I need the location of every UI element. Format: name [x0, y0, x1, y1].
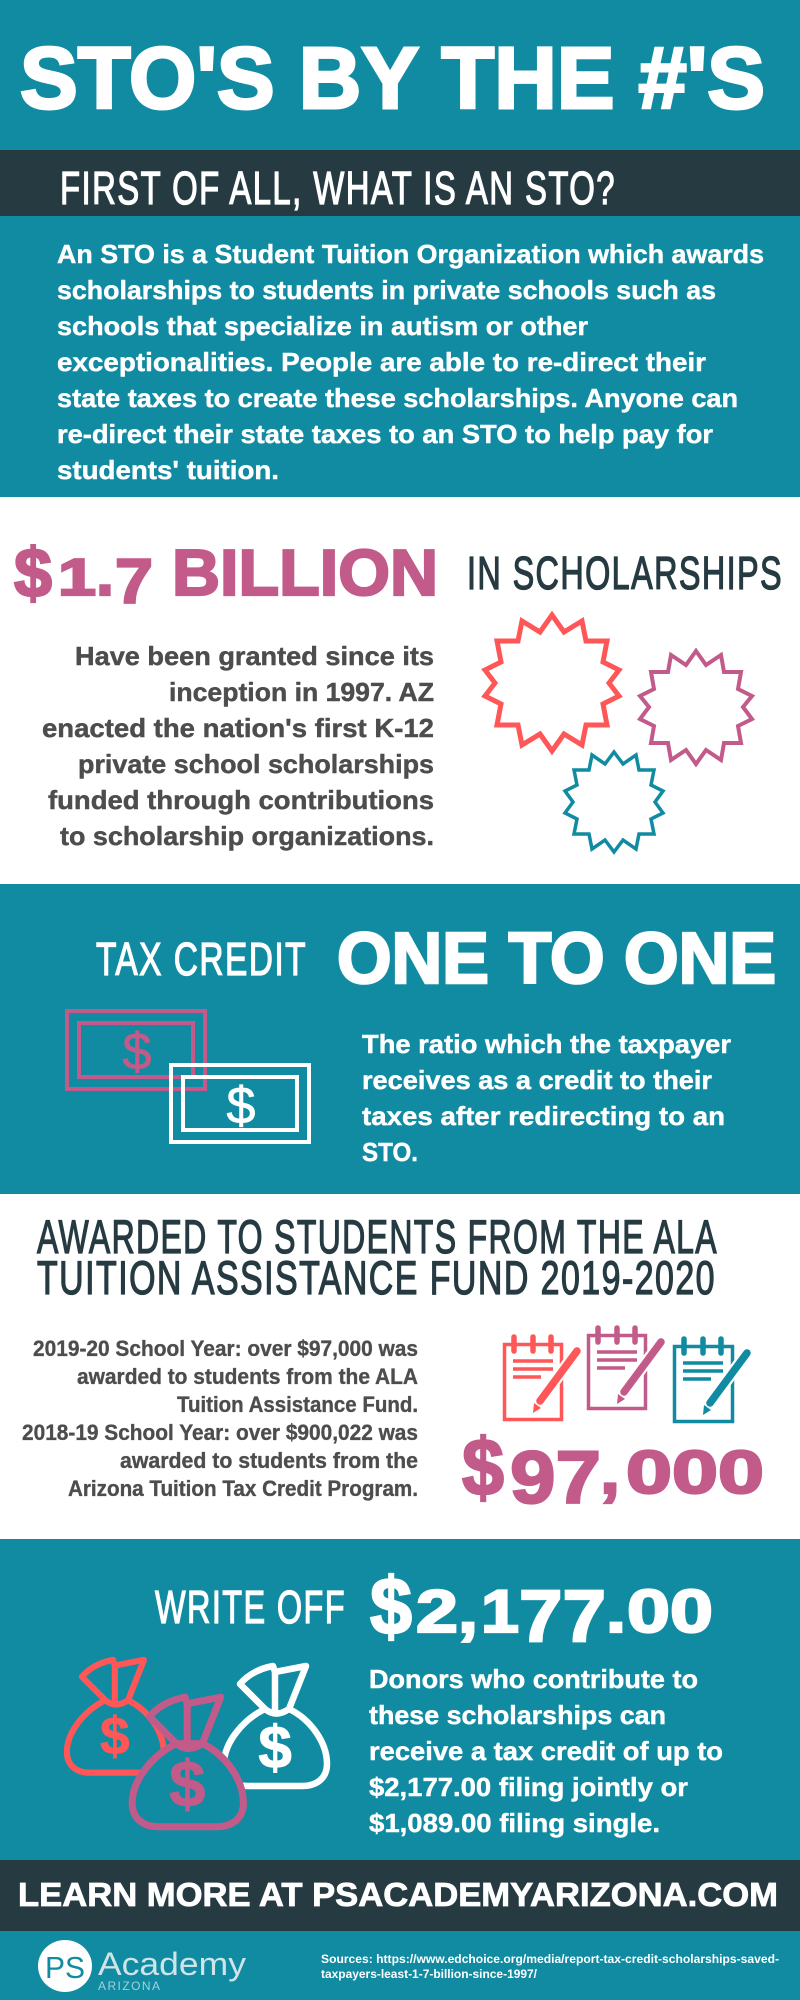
stat: $1.7 billion	[14, 534, 438, 617]
text block: award details: 2018-19 School Year: over $900,022 was	[22, 1420, 418, 1445]
stat: $2,177.00: 77	[519, 1576, 606, 1657]
icon: red money bag	[67, 1660, 164, 1773]
text block: award details: Arizona Tuition Tax Credit Program.	[68, 1476, 418, 1501]
text block: ratio	[362, 1029, 731, 1167]
text block: definition: state taxes to create these scholarships. Anyone can	[57, 383, 738, 413]
text block: definition	[57, 239, 764, 485]
panel: tax credit	[0, 884, 800, 1194]
panel: header	[0, 0, 800, 150]
text block: definition: schools that specialize in autism or other	[57, 311, 588, 341]
stat: $1.7 billion: .	[96, 536, 114, 609]
logo: PS Academy Arizona	[38, 1940, 246, 1993]
heading: write off: WRITE OFF	[155, 1581, 346, 1633]
text block: sources	[321, 1954, 779, 1981]
stat: $2,177.00	[370, 1562, 713, 1657]
icon: red money bag: $	[100, 1707, 129, 1766]
text block: definition: exceptionalities. People are able to re-direct their	[57, 347, 706, 377]
panel: footer	[0, 1931, 800, 2000]
logo: PS Academy Arizona: ARIZONA	[98, 1979, 160, 1993]
logo: PS Academy Arizona: PS	[45, 1950, 85, 1985]
stat: $97,000	[462, 1423, 764, 1519]
title: STO'S BY THE #'S	[20, 30, 765, 127]
icon: pink starburst	[640, 651, 752, 764]
text block: donors: $1,089.00 filing single.	[369, 1808, 660, 1838]
stat: $2,177.00: .	[606, 1577, 626, 1646]
stat: $2,177.00: 1	[481, 1578, 519, 1645]
stat: $2,177.00: ,	[458, 1577, 478, 1646]
icon: teal notepad	[674, 1339, 747, 1422]
stat: $2,177.00: $	[370, 1562, 412, 1652]
icon: pink banknote: $	[123, 1023, 152, 1081]
text block: history: Have been granted since its	[75, 641, 434, 671]
icon: pink money bag: $	[169, 1747, 205, 1820]
text block: sources: taxpayers-least-1-7-billion-since-1997/	[321, 1969, 538, 1981]
icon: pink notepad	[588, 1328, 661, 1408]
stat: $2,177.00: 2	[416, 1578, 458, 1645]
text block: history: funded through contributions	[48, 785, 434, 815]
stat: one to one: ONE TO ONE	[337, 919, 776, 999]
text block: award details: awarded to students from the ALA	[77, 1364, 418, 1389]
heading: tax credit: TAX CREDIT	[96, 933, 307, 985]
icon: pink banknote	[67, 1011, 205, 1089]
text block: history: enacted the nation's first K-12	[42, 713, 434, 743]
icon: white money bag	[224, 1666, 327, 1786]
text block: donors: Donors who contribute to	[369, 1664, 698, 1694]
text block: award details: awarded to students from the	[120, 1448, 418, 1473]
panel: awarded	[0, 1194, 800, 1539]
panel: STO definition	[0, 216, 800, 497]
text block: award details	[22, 1336, 418, 1501]
text block: history	[42, 641, 434, 851]
stat: $97,000: ,	[600, 1435, 620, 1507]
text block: history: to scholarship organizations.	[60, 821, 434, 851]
text block: definition: re-direct their state taxes to an STO to help pay for	[57, 419, 713, 449]
icon: white banknote	[171, 1065, 309, 1142]
text block: definition: students' tuition.	[57, 455, 279, 485]
text block: history: private school scholarships	[78, 749, 434, 779]
text block: definition: scholarships to students in private schools such as	[57, 275, 716, 305]
stat: $97,000: 000	[626, 1439, 764, 1506]
stat: $1.7 billion: 1	[58, 549, 96, 607]
text block: ratio: STO.	[362, 1137, 418, 1167]
panel: what is an STO heading band	[0, 150, 800, 216]
text block: ratio: receives as a credit to their	[362, 1065, 712, 1095]
panel: scholarships	[0, 497, 800, 884]
stat: $2,177.00: 00	[627, 1578, 713, 1645]
call to action: learn more: LEARN MORE AT PSACADEMYARIZONA.COM	[18, 1876, 778, 1913]
stat: $97,000: $	[462, 1423, 504, 1513]
text block: donors: $2,177.00 filing jointly or	[369, 1772, 688, 1802]
icon: red starburst	[485, 615, 619, 751]
stat: $1.7 billion: 7	[115, 547, 153, 617]
stat: $97,000: 97	[510, 1436, 601, 1519]
stat: $1.7 billion: $	[14, 534, 52, 612]
text block: ratio: taxes after redirecting to an	[362, 1101, 725, 1131]
text block: donors: receive a tax credit of up to	[369, 1736, 723, 1766]
text block: donors	[369, 1664, 723, 1838]
text block: donors: these scholarships can	[369, 1700, 666, 1730]
panel: write off	[0, 1539, 800, 1860]
text block: history: inception in 1997. AZ	[169, 677, 434, 707]
icon: red notepad	[504, 1337, 577, 1420]
text block: award details: 2019-20 School Year: over $97,000 was	[33, 1336, 418, 1361]
icon: white money bag: $	[258, 1714, 292, 1781]
text block: sources: Sources: https://www.edchoice.org/media/report-tax-credit-scholarships-saved-	[321, 1954, 779, 1966]
icon: teal starburst	[565, 752, 663, 852]
icon: white banknote: $	[227, 1077, 256, 1135]
heading: awarded to students	[37, 1210, 718, 1304]
text block: award details: Tuition Assistance Fund.	[177, 1392, 418, 1417]
panel: learn more band	[0, 1860, 800, 1931]
logo: PS Academy Arizona: Academy	[98, 1946, 246, 1982]
stat: $1.7 billion: BILLION	[172, 536, 438, 609]
icon: pink money bag	[132, 1697, 243, 1827]
text block: definition: An STO is a Student Tuition Organization which awards	[57, 239, 764, 269]
text block: ratio: The ratio which the taxpayer	[362, 1029, 731, 1059]
